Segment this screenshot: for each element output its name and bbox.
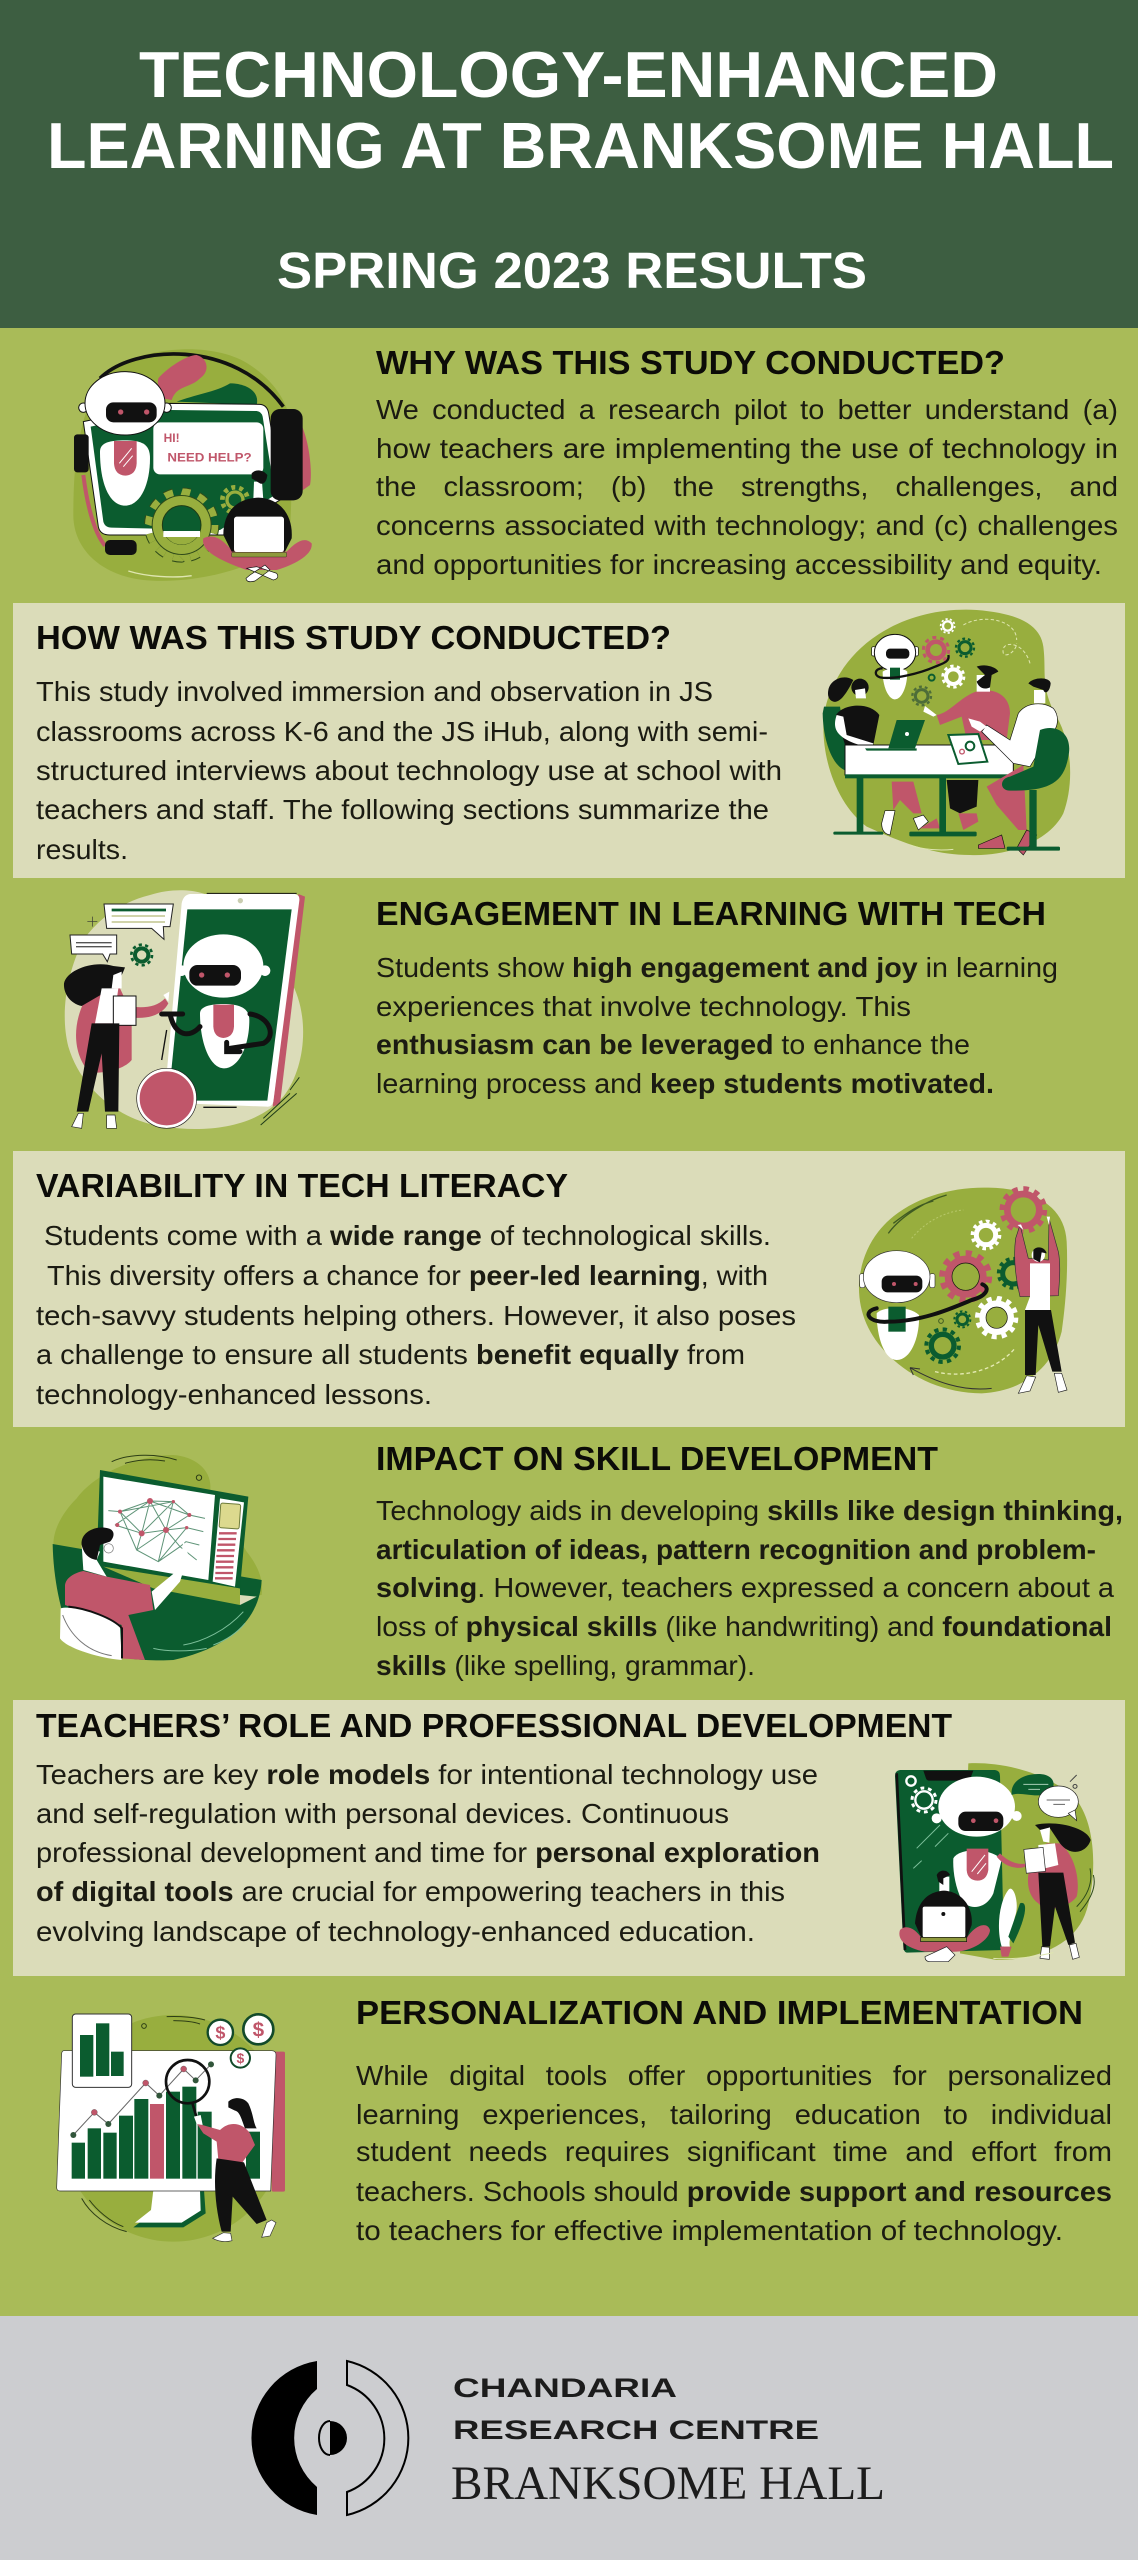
title banner (0, 0, 1138, 328)
text block: variability: This diversity offers a chance for peer-led learning , with (47, 1260, 768, 1291)
logo wordmark (451, 2373, 885, 2510)
heading: teachers: TEACHERS’ ROLE AND PROFESSIONAL DEVELOPMENT (36, 1708, 953, 1745)
panel: how was this study conducted (13, 603, 1125, 878)
icon: robot help screen: NEED HELP? (167, 450, 252, 464)
text block: engagement: learning process and keep students motivated. (376, 1068, 994, 1099)
icon: woman with phone robot (64, 890, 305, 1129)
footer (0, 2316, 1138, 2560)
text block: impact: solving. However, teachers expressed a concern about a (376, 1572, 1115, 1603)
panel: variability in tech literacy (13, 1151, 1125, 1427)
text block: teachers: and self-regulation with personal devices. Continuous (36, 1798, 729, 1829)
icon: person at touch screen with network (53, 1455, 262, 1660)
text block: impact (376, 1495, 1123, 1681)
text block: impact: skills (like spelling, grammar). (376, 1650, 755, 1681)
text block: how: This study involved immersion and observation in JS (36, 676, 713, 707)
text block: personalization: student needs requires significant time and effort from (356, 2136, 1112, 2167)
text block: personalization: to teachers for effective implementation of technology. (356, 2215, 1063, 2246)
text block: variability: a challenge to ensure all students benefit equally from (36, 1339, 745, 1370)
logo wordmark: RESEARCH CENTRE (453, 2415, 819, 2445)
text block: why: the classroom; (b) the strengths, challenges, and (376, 471, 1118, 502)
logo mark (251, 2361, 408, 2515)
text block: variability: tech-savvy students helping others. However, it also poses (36, 1300, 796, 1331)
text block: teachers (36, 1759, 820, 1947)
text block: how (36, 676, 782, 865)
text block: how: structured interviews about technology use at school with (36, 755, 782, 786)
text block: engagement: Students show high engagement and joy in learning (376, 952, 1058, 983)
text block: how: teachers and staff. The following sections summarize the (36, 794, 769, 825)
icon: robot and man with gears (859, 1188, 1067, 1393)
panel: impact on skill development (53, 1441, 1123, 1681)
text block: why: how teachers are implementing the use of technology in (376, 433, 1118, 464)
text block: why: concerns associated with technology; and (c) challenges (376, 510, 1118, 541)
text block: why: and opportunities for increasing accessibility and equity. (376, 549, 1102, 580)
panel: personalization and implementation (57, 1995, 1112, 2246)
icon: bar chart monitor with analyst: $ (236, 2050, 244, 2066)
icon: bar chart monitor with analyst: $ (253, 2019, 265, 2042)
heading: engagement: ENGAGEMENT IN LEARNING WITH TECH (376, 896, 1046, 933)
text block: engagement (376, 952, 1058, 1099)
text block: engagement: experiences that involve technology. This (376, 991, 911, 1022)
text block: engagement: enthusiasm can be leveraged to enhance the (376, 1029, 970, 1060)
text block: personalization: learning experiences, tailoring education to individual (356, 2099, 1112, 2130)
icon: robot, student and teacher with phone (895, 1763, 1094, 1962)
text block: variability: Students come with a wide range of technological skills. (44, 1220, 771, 1251)
text block: how: results. (36, 834, 128, 865)
icon: team around a table with robot (823, 610, 1070, 855)
panel: teachers' role and professional development (13, 1700, 1125, 1976)
heading: variability: VARIABILITY IN TECH LITERACY (36, 1168, 568, 1205)
text block: variability (36, 1220, 796, 1410)
heading: impact: IMPACT ON SKILL DEVELOPMENT (376, 1441, 939, 1478)
panel: why was this study conducted (73, 345, 1118, 582)
logo wordmark: CHANDARIA (453, 2373, 677, 2403)
text block: teachers: professional development and time for personal exploration (36, 1837, 820, 1868)
text block: impact: loss of physical skills (like handwriting) and foundational (376, 1611, 1112, 1642)
heading: how: HOW WAS THIS STUDY CONDUCTED? (36, 620, 671, 657)
text block: teachers: of digital tools are crucial for empowering teachers in this (36, 1876, 785, 1907)
text block: impact: articulation of ideas, pattern recognition and problem- (376, 1534, 1096, 1565)
text block: why: We conducted a research pilot to better understand (a) (376, 394, 1118, 425)
text block: teachers: Teachers are key role models for intentional technology use (36, 1759, 818, 1790)
title banner: TECHNOLOGY-ENHANCED (139, 38, 998, 111)
heading: personalization: PERSONALIZATION AND IMPLEMENTATION (356, 1995, 1083, 2032)
icon: robot help screen: HI! (164, 431, 180, 445)
panel: engagement in learning with tech (64, 890, 1058, 1129)
title banner: SPRING 2023 RESULTS (277, 242, 867, 299)
text block: why (376, 394, 1118, 580)
text block: how: classrooms across K-6 and the JS iHub, along with semi- (36, 716, 768, 747)
text block: variability: technology-enhanced lessons. (36, 1379, 432, 1410)
logo wordmark: BRANKSOME HALL (451, 2457, 885, 2510)
text block: personalization (356, 2060, 1112, 2246)
icon: bar chart monitor with analyst (57, 2014, 285, 2242)
text block: teachers: evolving landscape of technology-enhanced education. (36, 1916, 755, 1947)
icon: robot help screen (73, 349, 312, 582)
title banner: LEARNING AT BRANKSOME HALL (47, 109, 1114, 182)
text block: impact: Technology aids in developing skills like design thinking, (376, 1495, 1123, 1526)
heading: why: WHY WAS THIS STUDY CONDUCTED? (376, 345, 1005, 382)
text block: personalization: teachers. Schools should provide support and resources (356, 2176, 1112, 2207)
icon: bar chart monitor with analyst: $ (215, 2023, 225, 2043)
text block: personalization: While digital tools offer opportunities for personalized (356, 2060, 1112, 2091)
